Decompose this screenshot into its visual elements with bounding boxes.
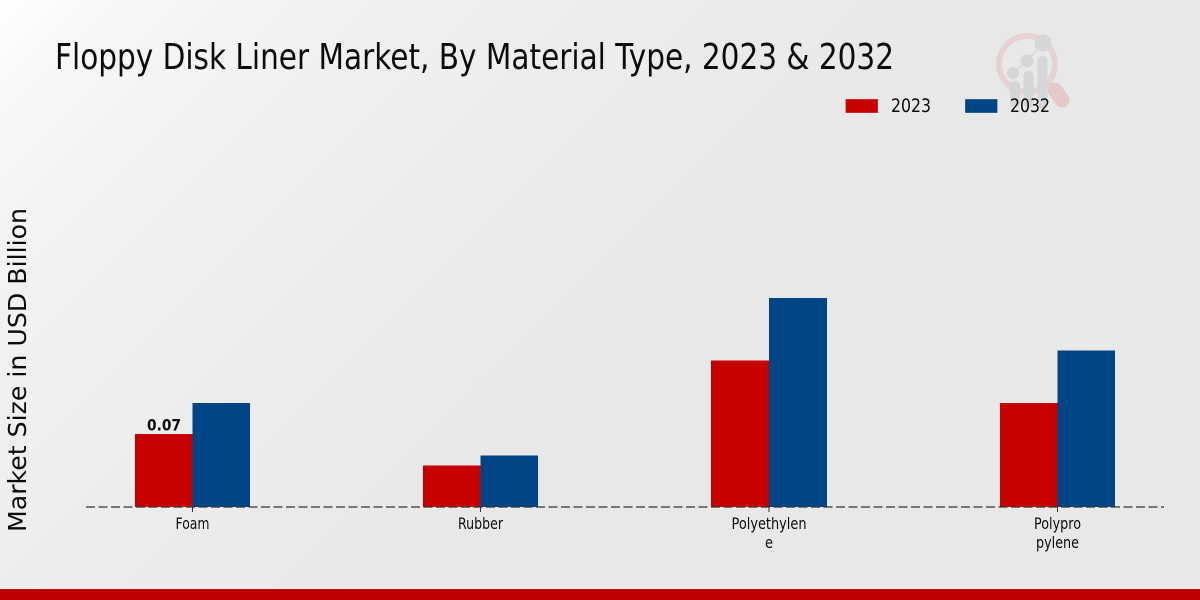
x label: Foam: Foam — [176, 514, 210, 533]
legend — [846, 95, 1050, 117]
x label: Polyethylene — [732, 514, 806, 552]
x label: Polyethylene: Polyethylen — [732, 514, 806, 533]
legend: 2023 — [846, 95, 931, 117]
x axis baseline — [86, 506, 1164, 508]
value label: 0.07 — [147, 416, 181, 434]
legend: 2032: 2032 — [1010, 95, 1050, 117]
bars: Polypropylene — [1000, 350, 1115, 507]
bars: Foam — [135, 403, 250, 507]
legend: 2023: 2023 — [891, 95, 931, 117]
bars: Polyethylene — [711, 298, 827, 507]
x label: Polypropylene: Polypro — [1034, 514, 1081, 533]
bars: Rubber — [423, 456, 538, 507]
title: Floppy Disk Liner Market, By Material Type, 2023 & 2032 — [55, 37, 894, 78]
x label: Rubber: Rubber — [458, 514, 503, 533]
y axis label: Market Size in USD Billion — [3, 208, 32, 532]
x label: Polypropylene — [1034, 514, 1081, 552]
legend: 2032 — [965, 95, 1050, 117]
footer bar — [0, 589, 1200, 600]
x label: Polyethylene: e — [765, 533, 773, 552]
x label: Polypropylene: pylene — [1036, 533, 1079, 552]
bar chart — [86, 298, 1164, 552]
watermark logo — [999, 34, 1062, 108]
